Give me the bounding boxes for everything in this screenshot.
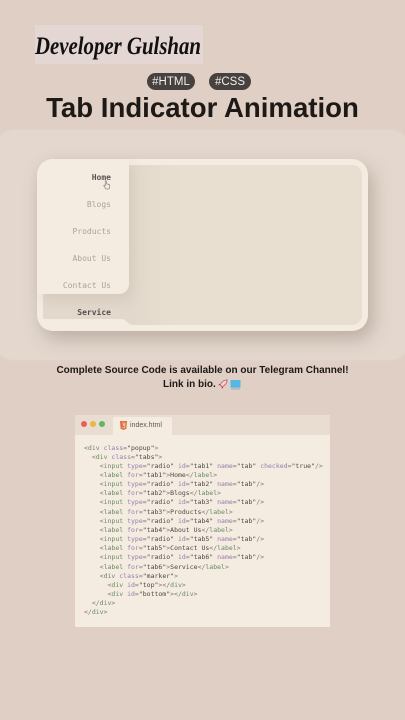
tab label: Products: Products (72, 227, 111, 236)
tab label: About Us: About Us (72, 254, 111, 262)
icon: rocket (218, 380, 228, 389)
panel: sidebar tabs (37, 159, 129, 294)
panel: service tab bottom edge (44, 319, 130, 325)
tab label: Blogs: Blogs (87, 200, 111, 209)
code block: <div class="popup"> <div class="tabs"> <input type="radio" id="tab1" name="tab" checked="true"/> <label for="tab1">Home</label> <input type="radio" id="tab2" name="tab"/> <label for="tab2">Blogs</label> <input type="radio" id="tab3" name="tab"/> <label for="tab3">Products</label> <input type="radio" id="tab4" name="tab"/> <label for="tab4">About Us</label> <input type="radio" id="tab5" name="tab"/> <label for="tab5">Contact Us</label> <input type="radio" id="tab6" name="tab"/> <label for="tab6">Service</label> <div class="marker"> <div id="top"></div> <div id="bottom"></div> </div> </div> (84, 444, 323, 616)
icon: hand cursor (104, 180, 110, 190)
watermark: Developer Gulshan (35, 25, 203, 64)
tag: #CSS: #CSS (215, 76, 245, 88)
icon: computer (230, 380, 240, 390)
tab label: Contact Us: Contact Us (63, 280, 111, 290)
tag: #HTML: #HTML (152, 76, 190, 88)
window dot: red (81, 421, 87, 427)
tag: #HTML (147, 73, 195, 90)
caption: link in bio: Link in bio. (163, 379, 216, 390)
panel: popup card (37, 159, 368, 331)
title: Tab Indicator Animation (46, 92, 359, 123)
file tab: index.html (113, 417, 172, 435)
tag: #CSS (209, 73, 251, 90)
window dot: green (99, 421, 105, 427)
window dot: yellow (90, 421, 96, 427)
icon: html5 (120, 421, 127, 430)
file name: index.html (130, 422, 162, 429)
tab label: Service: Service (77, 308, 111, 316)
panel: content area (43, 165, 362, 325)
panel: code editor (75, 415, 330, 627)
tab label: Home: Home (92, 173, 111, 182)
panel: demo band (0, 130, 405, 360)
editor title bar (75, 415, 330, 435)
caption: source code note: Complete Source Code is available on our Telegram Channel! (56, 365, 349, 376)
